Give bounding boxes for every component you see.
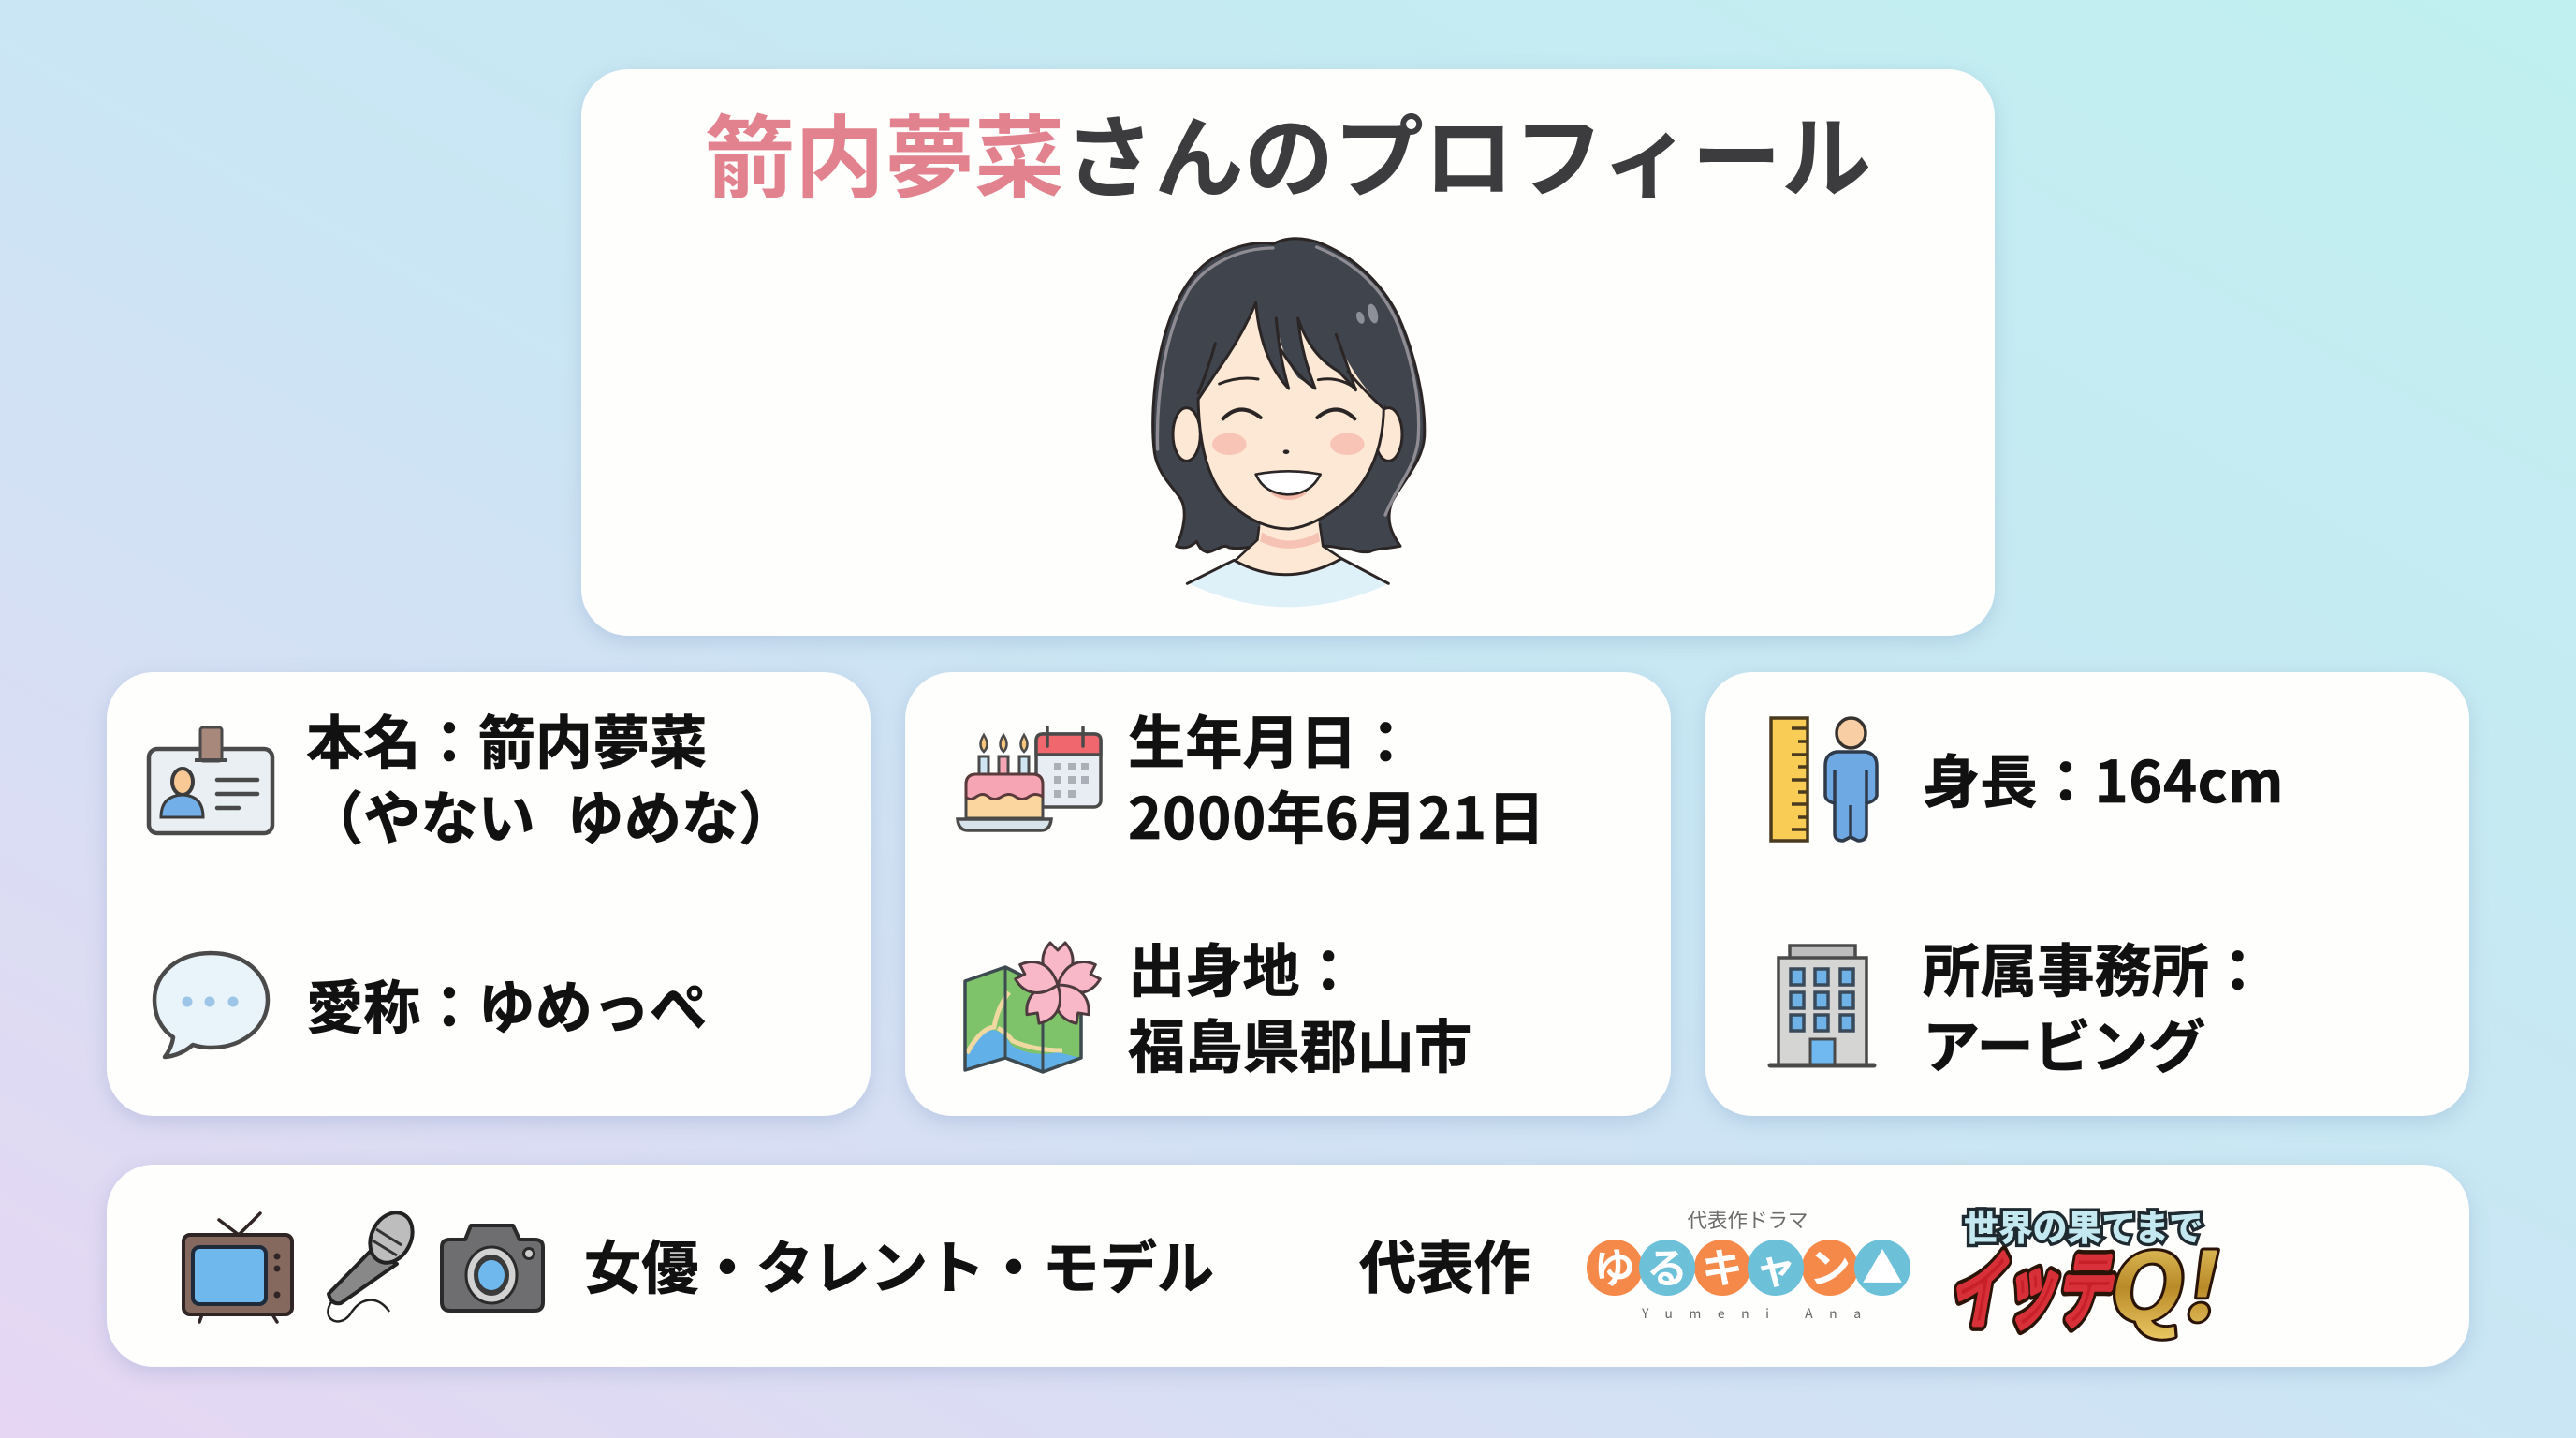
title: 箭内夢菜さんのプロフィール <box>705 86 1871 216</box>
height text: 身長：164cm <box>1923 736 2284 819</box>
nickname text: 愛称：ゆめっぺ <box>306 961 707 1045</box>
icon: map with cherry blossom <box>963 941 1102 1074</box>
logo: 世界の果てまでイッテQ!: Q! <box>2100 1214 2234 1347</box>
icon: microphone <box>327 1211 415 1323</box>
logo: ゆるキャン△: キ <box>1702 1235 1743 1295</box>
logo: ゆるキャン△: ▲ <box>1862 1235 1903 1295</box>
logo: ゆるキャン△: ン <box>1809 1235 1851 1295</box>
logo: 世界の果てまでイッテQ!: イッテ <box>1945 1225 2126 1344</box>
portrait illustration <box>1151 237 1427 607</box>
occupation text: 女優・タレント・モデル <box>584 1222 1214 1305</box>
logo: 世界の果てまでイッテQ!: 世界の果てまで <box>1964 1199 2203 1251</box>
icon: cake and calendar <box>956 726 1103 832</box>
panel: title and portrait <box>581 69 1995 636</box>
representative works heading: 代表作 <box>1359 1222 1531 1305</box>
logo: 世界の果てまでイッテQ!: イッテ <box>1945 1225 2126 1344</box>
icon: television <box>182 1211 294 1324</box>
logo: ゆるキャン△ <box>1587 1205 1910 1323</box>
icon: speech bubble <box>152 951 270 1060</box>
panel: name and nickname <box>107 672 871 1116</box>
logo: ゆるキャン△: ャ <box>1755 1235 1796 1295</box>
logo: ゆるキャン△: る <box>1647 1235 1688 1295</box>
logo: ゆるキャン△: ゆ <box>1594 1235 1635 1295</box>
icon: ID card <box>146 726 275 835</box>
logo: ゆるキャン△: Yumeni Ana <box>1641 1304 1878 1323</box>
birthplace text: 出身地： 福島県郡山市 <box>1128 925 1471 1084</box>
panel: occupation and representative works <box>107 1165 2469 1367</box>
icon: ruler and person <box>1769 716 1879 843</box>
panel: birthday and birthplace <box>905 672 1671 1116</box>
agency text: 所属事務所： アービング <box>1923 925 2266 1084</box>
panel: height and agency <box>1705 672 2469 1116</box>
name text: 本名：箭内夢菜 （やない ゆめな） <box>306 697 796 856</box>
icon: office building <box>1767 944 1876 1067</box>
logo: ゆるキャン△: 代表作ドラマ <box>1687 1205 1808 1234</box>
birthday text: 生年月日： 2000年6月21日 <box>1128 697 1545 856</box>
icon: camera <box>440 1224 545 1313</box>
